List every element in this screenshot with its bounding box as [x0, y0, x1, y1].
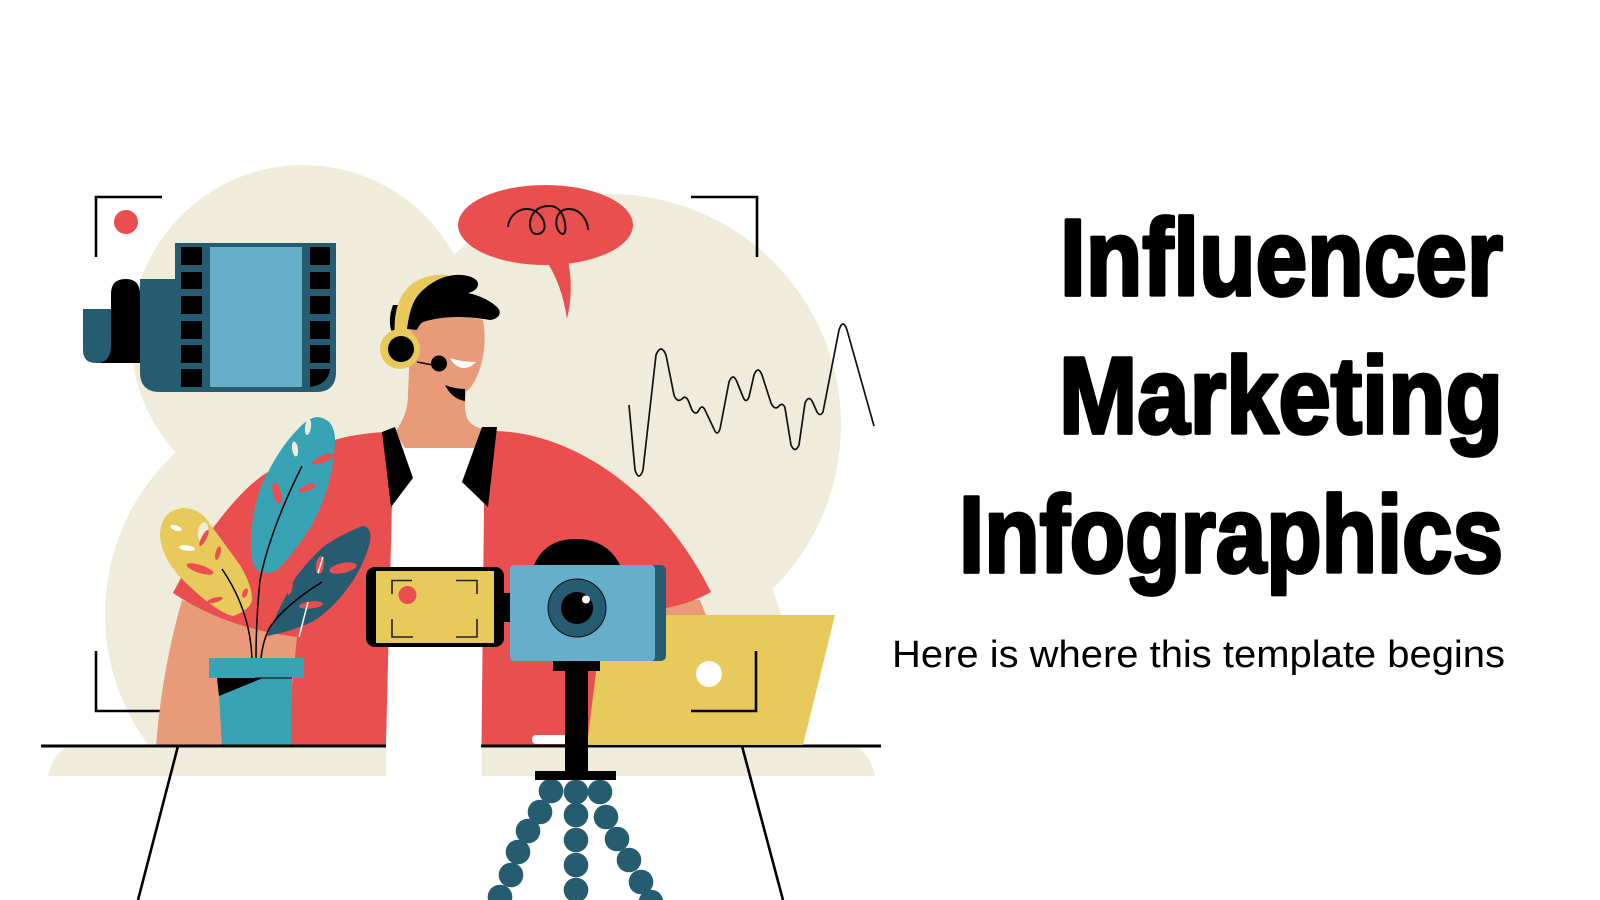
tripod beads [488, 779, 663, 900]
table [41, 746, 881, 900]
plant stems [222, 466, 322, 658]
waveform line chart [629, 324, 874, 476]
yellow leaf [160, 508, 252, 616]
recording dot [114, 210, 138, 234]
title [959, 197, 1503, 596]
frame corner: top right [691, 197, 757, 257]
pot [209, 658, 304, 746]
left arm skin [156, 600, 297, 746]
white t-shirt [386, 448, 484, 776]
title: Influencer [1060, 197, 1503, 319]
potted plant [160, 417, 370, 746]
right arm skin [660, 600, 708, 620]
icon: speech bubble [458, 185, 633, 319]
frame corner: top left [96, 197, 162, 257]
red shirt right [481, 431, 711, 746]
background beige blob [48, 165, 875, 834]
icon: film camera [83, 243, 336, 392]
video camera [510, 539, 666, 661]
laptop [587, 615, 835, 745]
illustration and title canvas [41, 165, 1504, 900]
headphone ear cup [380, 329, 420, 369]
person [156, 275, 711, 776]
phone on rig [366, 567, 512, 647]
tripod stand [535, 660, 616, 780]
red shirt left [173, 432, 392, 746]
neck and face [395, 316, 485, 448]
title: Marketing [1059, 335, 1503, 457]
headband [390, 275, 448, 340]
collar left [382, 427, 413, 507]
title: Infographics [959, 474, 1503, 596]
hair [407, 275, 500, 330]
teal leaf [251, 417, 335, 573]
white pen on table [532, 735, 572, 744]
beard [445, 385, 465, 401]
dark teal leaf [267, 526, 370, 637]
collar right [462, 427, 497, 507]
smile [450, 358, 476, 368]
frame corner: bottom left [96, 651, 162, 711]
microphone [417, 362, 433, 365]
subtitle: Here is where this template begins [892, 634, 1505, 676]
